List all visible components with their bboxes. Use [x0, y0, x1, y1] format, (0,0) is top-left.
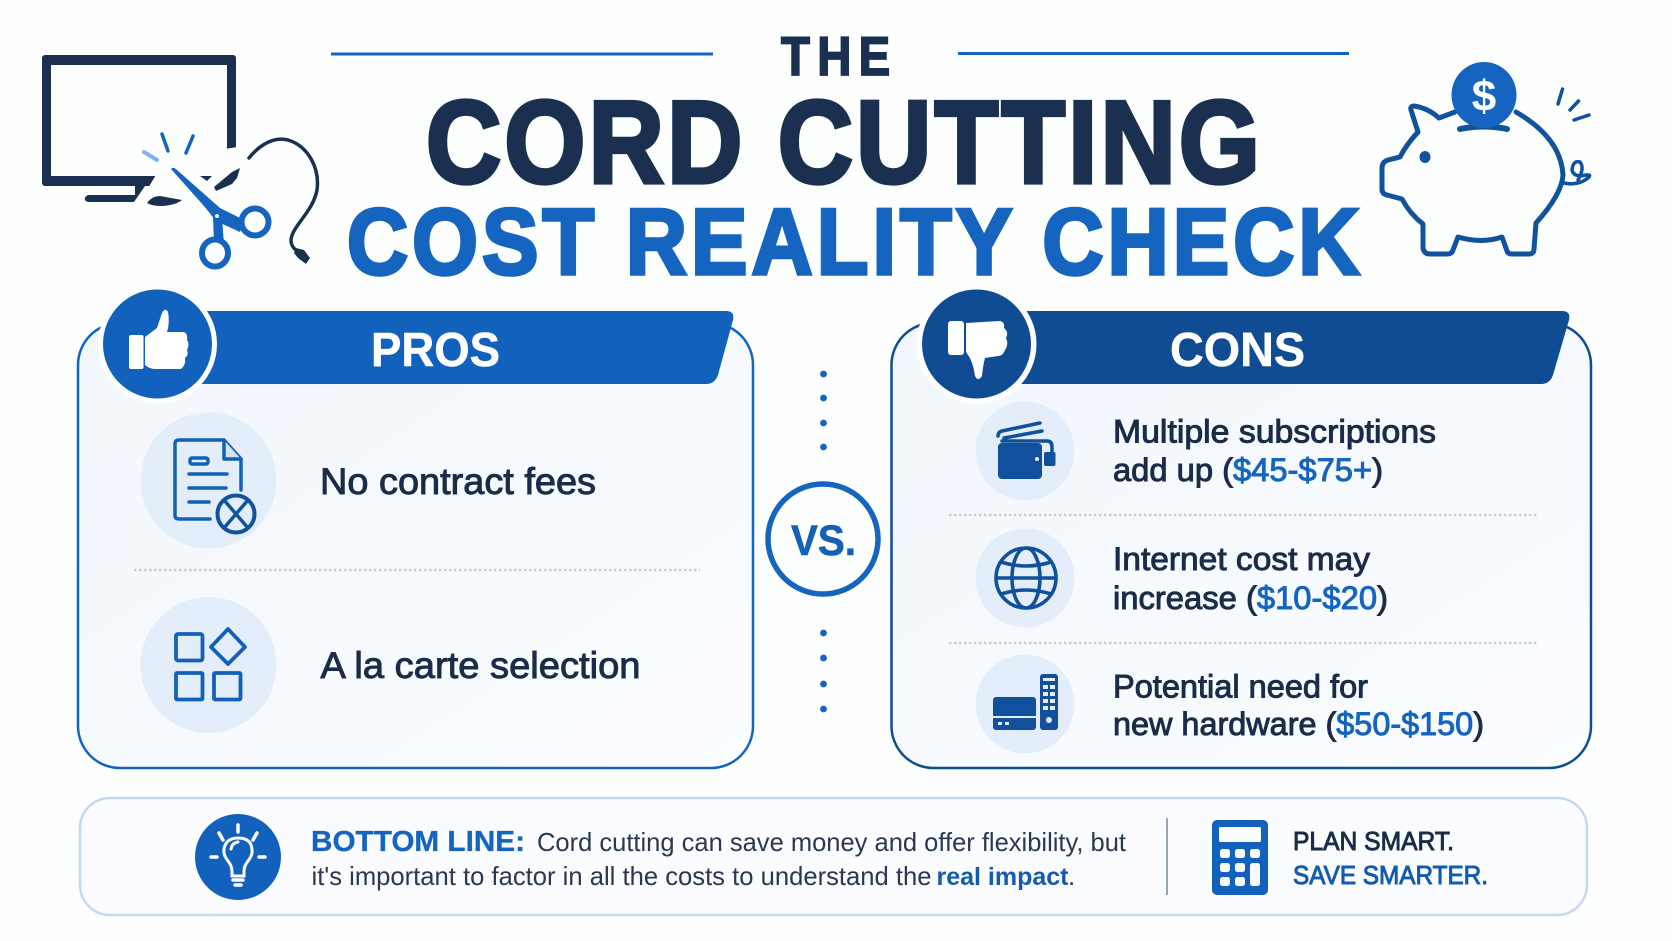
text: new hardware: new hardware ($50-$150) — [1113, 706, 1484, 742]
text: internet cost: increase ($10-$20) — [1113, 580, 1388, 616]
pros item: a la carte selection — [140, 597, 640, 733]
text: plan smart save smarter: PLAN SMART. — [1293, 826, 1454, 856]
text: bottom line statement: real impact — [936, 863, 1069, 891]
text: plan smart save smarter: SAVE SMARTER. — [1293, 860, 1488, 890]
icon: thumbs up — [98, 284, 217, 404]
text: no contract fees: No contract fees — [320, 461, 596, 502]
text: a la carte selection: A la carte selection — [320, 645, 640, 686]
text: bottom line statement: it's important to factor in all the costs to understand the — [312, 861, 932, 891]
icon: scissors — [144, 134, 268, 266]
text: bottom line statement: Cord cutting can save money and offer flexibility, but — [537, 827, 1127, 857]
icon: calculator — [1212, 820, 1268, 895]
pros header banner — [190, 311, 733, 384]
pros item: no contract fees — [140, 412, 596, 548]
icon: thumbs down — [916, 284, 1036, 404]
icon: dollar coin: $ — [1472, 72, 1496, 121]
vs divider — [768, 371, 878, 712]
text: bottom line statement: . — [1068, 861, 1075, 891]
icon: TV with cut cord and scissors — [42, 55, 317, 266]
cons header banner — [1015, 311, 1569, 384]
icon: dollar coin — [1452, 62, 1516, 128]
pros header label: PROS — [371, 324, 500, 377]
icon: contract with cross — [175, 440, 254, 532]
title: the: THE — [781, 26, 890, 87]
text: internet cost: Internet cost may — [1113, 541, 1370, 577]
panel: pros — [78, 284, 753, 768]
vs badge — [768, 484, 878, 594]
icon: piggy bank with coin — [1382, 62, 1590, 254]
text: multiple subscriptions: add up ($45-$75+) — [1113, 452, 1383, 488]
icon: lightbulb — [195, 814, 281, 900]
cons header label: CONS — [1170, 324, 1305, 377]
icon: cut cable — [249, 139, 317, 264]
title: cord cutting: CORD CUTTING — [426, 78, 1260, 208]
panel: bottom line — [80, 798, 1587, 915]
panel: cons — [892, 284, 1591, 768]
text: multiple subscriptions: Multiple subscriptions — [1113, 414, 1436, 450]
icon: television monitor — [42, 55, 250, 210]
icon: globe — [996, 548, 1056, 608]
text: bottom line statement: BOTTOM LINE: — [311, 826, 525, 858]
title — [331, 26, 1360, 294]
text: bottom line statement — [311, 826, 1127, 891]
icon: shapes grid — [176, 629, 245, 700]
icon: streaming box and remote — [993, 674, 1058, 730]
text: new hardware: Potential need for — [1113, 668, 1368, 704]
icon: wallet — [998, 423, 1056, 479]
text: plan smart save smarter — [1293, 826, 1488, 890]
cons item: multiple subscriptions — [976, 402, 1445, 500]
cons item: new hardware — [976, 654, 1484, 754]
cons item: internet cost — [976, 528, 1388, 628]
vs badge: VS. — [791, 517, 856, 565]
title: cost reality check: COST REALITY CHECK — [347, 189, 1360, 294]
